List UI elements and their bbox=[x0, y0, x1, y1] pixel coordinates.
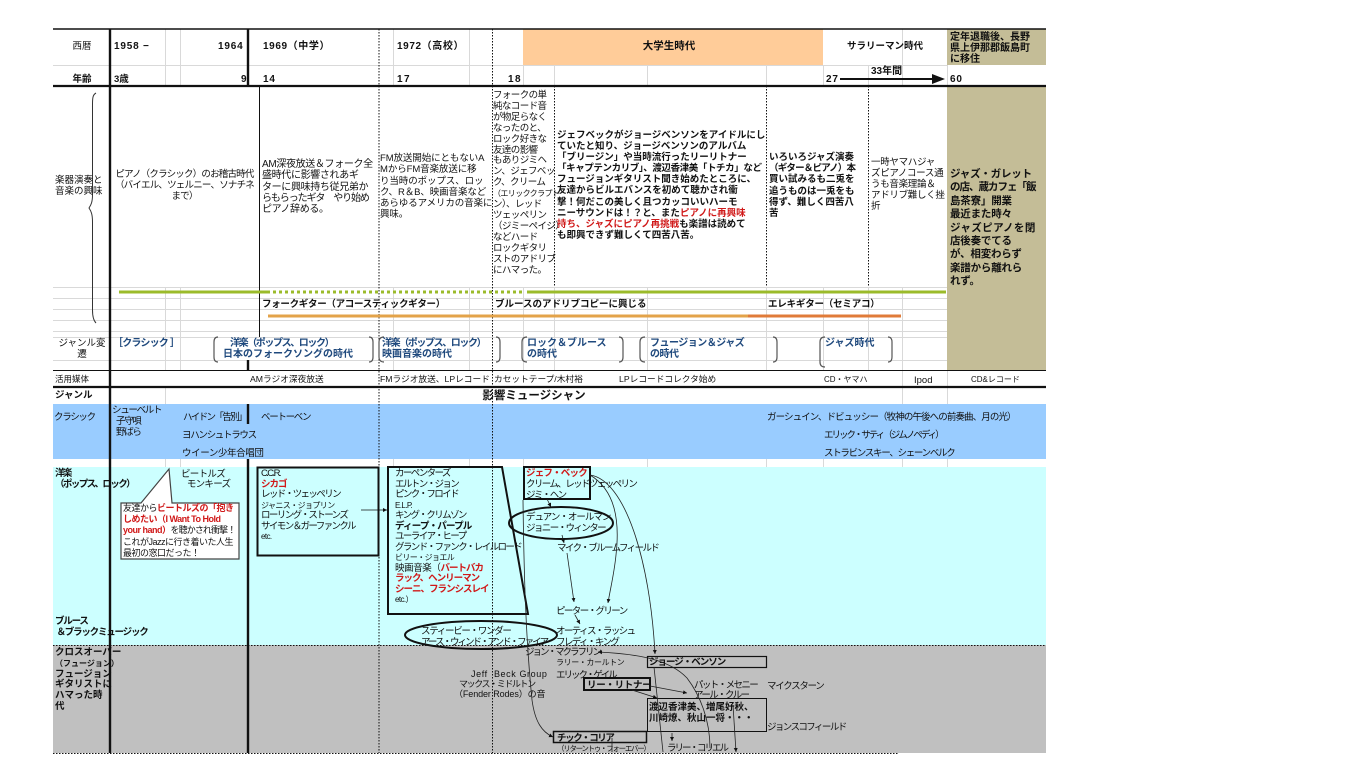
list: seventies artists: グランド・ファンク・レイルロード bbox=[395, 542, 521, 552]
list: seventies artists: ユーライア・ヒープ bbox=[395, 531, 466, 542]
list: seventies artists: ピンク・フロイド bbox=[395, 489, 458, 500]
genre: fusion and jazz era: フュージョン＆ジャズ bbox=[650, 338, 744, 349]
text: jazz cafe: 店後奏でてる bbox=[950, 235, 1012, 247]
text: FM radio period: あらゆるアメリカの音楽に bbox=[380, 198, 492, 209]
text: folk to rock period: 純なコード音 bbox=[493, 101, 546, 112]
text: fusion discovery: 撃！何だこの美しく且つカッコいいハーモ bbox=[557, 197, 738, 208]
list: first rock artists: サイモン＆ガーファンクル bbox=[261, 520, 355, 532]
text: yamaha course: アドリブ難しく挫 bbox=[871, 190, 945, 201]
header: age row: 9 bbox=[241, 74, 247, 85]
text: jazz attempts: いろいろジャズ演奏 bbox=[769, 152, 854, 163]
text: jazz cafe: れず。 bbox=[950, 275, 980, 287]
list: first rock artists: ローリング・ストーンズ bbox=[261, 510, 347, 521]
panel text: classical musicians: シューベルト bbox=[112, 405, 161, 416]
label: electric guitar: エレキギター（セミアコ） bbox=[768, 299, 880, 310]
label: crossover fusion: クロスオーバー bbox=[55, 647, 121, 658]
text: yamaha course bbox=[871, 156, 945, 212]
text: Pat Metheny and Earl Klugh: パット・メセニー bbox=[694, 680, 757, 691]
list: seventies artists: 映画音楽（バートバカ bbox=[395, 562, 483, 574]
text: Japanese guitarists: 渡辺香津美、増尾好秋、 bbox=[649, 702, 754, 713]
text: jazz cafe: が、相変わらず bbox=[950, 248, 1022, 260]
text: fusion discovery: フュージョンギタリスト聞き始めたところに、 bbox=[557, 174, 756, 185]
list: Duane Allman and Johnny Winter: ジョニー・ウィンター bbox=[526, 523, 605, 534]
label: blues copying: ブルースのアドリブコピーに興じる bbox=[495, 299, 647, 310]
text: AM radio period: ピアノ辞める。 bbox=[262, 204, 329, 215]
list: Stevie Wonder and Earth Wind and Fire: アース・ウィンド・アンド・ファイア bbox=[421, 636, 547, 648]
row: media used: 活用媒体 bbox=[55, 374, 89, 384]
label: genre changes: 遷 bbox=[77, 349, 87, 360]
row: media used: CD&レコード bbox=[971, 375, 1020, 384]
text: folk to rock period: ン、ジェフベッ bbox=[493, 166, 555, 177]
header: retirement note: 県上伊那郡飯島町 bbox=[950, 43, 1030, 54]
box: Chick Corea bbox=[554, 732, 646, 742]
list: seventies artists: ラック、ヘンリーマン bbox=[395, 573, 479, 584]
header: year row: 西暦 bbox=[72, 41, 92, 52]
text: FM radio period: 興味。 bbox=[380, 209, 408, 220]
text: AM radio period: ターに興味持ち従兄弟か bbox=[262, 182, 368, 193]
text: folk to rock period: （エリッククラプト bbox=[493, 189, 559, 198]
list: Jeff Beck influences: ジェフ・ベック bbox=[526, 468, 587, 479]
text: fusion discovery: ていたと知り、ジョージベンソンのアルバム bbox=[557, 141, 746, 152]
text: jazz attempts: 買い試みるも二兎を bbox=[769, 174, 855, 185]
genre: pops rock and folk era bbox=[223, 337, 353, 360]
text: yamaha course: 一時ヤマハジャ bbox=[871, 157, 935, 168]
ellipse: Duane and Johnny bbox=[509, 507, 613, 539]
text: Eric Gale: エリック・ゲイル bbox=[556, 670, 616, 681]
panel text: classical musicians: エリック・サティ（ジムノペディ） bbox=[824, 430, 943, 441]
list: Jeff Beck influences: クリーム、レッドツェッペリン bbox=[526, 479, 636, 490]
text: George Benson: ジョージ・ベンソン bbox=[649, 657, 725, 668]
text: yamaha course: うも音楽理論＆ bbox=[871, 179, 935, 190]
label: instruments and interests: 楽器演奏と bbox=[55, 175, 103, 186]
header: age row: 18 bbox=[508, 74, 522, 85]
header: age row: 3歳 bbox=[114, 74, 129, 85]
text: FM radio period bbox=[380, 152, 492, 220]
label: instruments and interests: 音楽の興味 bbox=[55, 186, 103, 197]
text: AM radio period: AM深夜放送＆フォーク全 bbox=[262, 159, 373, 170]
list: seventies artists: ディープ・パープル bbox=[395, 520, 472, 532]
row: media used: カセットテープ/木村裕 bbox=[494, 374, 583, 384]
text: fusion discovery bbox=[557, 129, 765, 241]
list: first rock artists: etc. bbox=[261, 532, 272, 541]
box: Japanese guitarists bbox=[648, 698, 766, 732]
header: age row: 27 bbox=[826, 74, 839, 85]
label: blues and black music bbox=[55, 615, 148, 638]
header: age row: 14 bbox=[263, 74, 276, 85]
header: age row: 17 bbox=[397, 74, 411, 85]
arrow: 27 to 60, 33 years bbox=[840, 74, 945, 84]
panel text: classical musicians: ベートーベン bbox=[261, 412, 310, 423]
text: jazz attempts: 追うものは一兎をも bbox=[769, 186, 855, 197]
header: retirement note: 定年退職後、長野 bbox=[950, 32, 1030, 43]
panel text: classical musicians: ストラビンスキー、シェーンベルク bbox=[824, 448, 954, 459]
text: piano period: ピアノ（クラシック）のお稽古時代 bbox=[115, 169, 254, 180]
text: folk to rock period: 友達の影響 bbox=[493, 145, 538, 156]
text: AM radio period: らもらったギタ やり始め bbox=[262, 193, 369, 204]
text: Return to Forever: （リターントゥ・フォーエバー） bbox=[557, 744, 650, 753]
text: jazz cafe: の店、蔵カフェ「飯 bbox=[950, 181, 1036, 193]
panel text: classical musicians: クラシック bbox=[54, 412, 95, 423]
genre: pops rock and folk era: 日本のフォークソングの時代 bbox=[223, 349, 353, 360]
genre: fusion and jazz era: の時代 bbox=[650, 349, 678, 360]
callout text bbox=[123, 503, 235, 558]
label: folk guitar: フォークギター（アコースティックギター） bbox=[262, 299, 445, 310]
label: genre changes bbox=[58, 338, 106, 360]
text: jazz cafe: 楽譜から離れら bbox=[950, 262, 1022, 274]
text: Pat Metheny and Earl Klugh bbox=[694, 680, 758, 700]
text: folk to rock period bbox=[493, 90, 564, 276]
label: crossover fusion: ハマった時 bbox=[55, 690, 103, 701]
list: Stevie Wonder and Earth Wind and Fire bbox=[421, 626, 548, 648]
panel text: classical musicians: ヨハンシュトラウス bbox=[182, 430, 256, 441]
text: Jeff Beck Group note: （Fender Rodes）の音 bbox=[454, 689, 545, 699]
text: jazz cafe: ジャズピアノを閉 bbox=[950, 222, 1036, 234]
box: first rock artists bbox=[258, 468, 378, 556]
label: crossover fusion: ギタリストに bbox=[55, 679, 112, 690]
list: Jeff Beck influences: ジミ・ヘン bbox=[526, 490, 566, 501]
icon: curly brace bbox=[89, 93, 96, 323]
text: folk to rock period: などハード bbox=[493, 232, 538, 243]
header: year row: サラリーマン時代 bbox=[847, 41, 923, 52]
ellipse: Stevie and EWF bbox=[405, 621, 557, 649]
text: fusion discovery: も即興できず難しくて四苦八苦。 bbox=[557, 230, 699, 241]
text: piano period: まで） bbox=[171, 191, 198, 202]
panel: classical band bbox=[53, 404, 1046, 459]
header: age row: 年齢 bbox=[72, 74, 92, 85]
text: FM radio period: MからFM音楽放送に移 bbox=[380, 164, 477, 175]
text: jazz cafe: ジャズ・ガレット bbox=[950, 168, 1032, 180]
genre: jazz era: ジャズ時代 bbox=[825, 338, 874, 349]
label: crossover fusion: （フュージョン） bbox=[55, 659, 119, 668]
text: Larry Coryell: ラリー・コリエル bbox=[667, 743, 727, 754]
text: folk to rock period: ロックギタリ bbox=[493, 243, 546, 254]
panel text: classical musicians: ガーシュイン、ドビュッシー（牧神の午後への前奏曲、月の光） bbox=[767, 412, 1016, 423]
text: Mike Bloomfield: マイク・ブルームフィールド bbox=[557, 543, 658, 554]
genre: pops rock and film music era: 映画音楽の時代 bbox=[382, 349, 452, 360]
genre era brackets bbox=[214, 337, 892, 367]
text: beatles and monkees bbox=[181, 468, 230, 490]
label: pops and rock: （ポップス、ロック） bbox=[55, 478, 134, 490]
text: FM radio period: FM放送開始にともないA bbox=[380, 153, 484, 164]
row: media used: AMラジオ深夜放送 bbox=[250, 374, 324, 384]
label: blues and black music: ＆ブラックミュージック bbox=[56, 627, 148, 638]
genre: pops rock and film music era: 洋楽（ポップス、ロック） bbox=[382, 338, 485, 349]
text: Jeff Beck Group note: マックス・ミドルトン bbox=[459, 679, 535, 689]
text: fusion discovery: 友達からビルエバンスを初めて聴かされ衝 bbox=[557, 185, 738, 196]
text: Lee Ritenour: リー・リトナー bbox=[587, 680, 651, 691]
text: AM radio period: 盛時代に影響されあギ bbox=[262, 170, 358, 181]
timeline: piano line bbox=[119, 290, 946, 294]
text: fusion discovery: ジェフベックがジョージベンソンをアイドルにし bbox=[557, 130, 765, 141]
text: Japanese guitarists: 川崎燎、秋山一将・・・ bbox=[649, 712, 754, 724]
text: John McLaughlin: ジョン・マクラフリン bbox=[525, 647, 600, 658]
text: Mike Stern: マイクスターン bbox=[767, 681, 823, 692]
genre: fusion and jazz era bbox=[650, 336, 744, 360]
list: first rock artists: C.C.R. bbox=[261, 468, 280, 479]
genre: rock and blues era bbox=[527, 336, 606, 360]
genre: rock and blues era: ロック＆ブルース bbox=[527, 338, 606, 349]
panel: retirement column bbox=[947, 87, 1046, 370]
label: 33 years: 33年間 bbox=[871, 66, 902, 77]
text: jazz cafe bbox=[950, 168, 1036, 287]
genre: pops rock and folk era: 洋楽（ポップス、ロック） bbox=[230, 338, 333, 349]
header: year row: 1969（中学） bbox=[263, 41, 330, 52]
text: folk to rock period: ストのアドリブ bbox=[493, 254, 555, 265]
arrow: rock to seventies bbox=[361, 509, 387, 511]
text: Jeff Beck Group note: Jeff Beck Group bbox=[471, 669, 547, 679]
text: folk to rock period: フォークの単 bbox=[493, 90, 546, 101]
header: year row: 1958 − bbox=[114, 41, 150, 52]
text: jazz attempts: 苦 bbox=[769, 208, 779, 219]
text: fusion discovery: ニーサウンドは！？と、またピアノに再興味 bbox=[557, 208, 746, 219]
header: year row: 1972（高校） bbox=[397, 41, 464, 52]
panel text: classical musicians: 子守唄 bbox=[116, 416, 141, 427]
panel text: classical musicians: ハイドン「告別」 bbox=[183, 412, 246, 423]
list: Stevie Wonder and Earth Wind and Fire: スティービー・ワンダー bbox=[421, 626, 511, 637]
text: folk to rock period: ロック好きな bbox=[493, 134, 546, 145]
text: piano period bbox=[115, 168, 254, 202]
arrows: influence connections bbox=[523, 475, 736, 752]
label: genre changes: ジャンル変 bbox=[58, 338, 106, 349]
text: jazz cafe: 島茶寮」開業 bbox=[950, 195, 1012, 207]
list: seventies artists: キング・クリムゾン bbox=[395, 510, 466, 521]
row: media used: LPレコードコレクタ始め bbox=[619, 374, 716, 384]
label: crossover fusion: 代 bbox=[55, 701, 65, 712]
box: seventies artists bbox=[388, 467, 528, 614]
panel text: classical musicians: 野ばら bbox=[116, 427, 141, 438]
label: genre column: ジャンル bbox=[55, 390, 93, 401]
text: yamaha course: 折 bbox=[871, 201, 880, 212]
row: media used: Ipod bbox=[914, 375, 932, 386]
row: media used: CD・ヤマハ bbox=[824, 375, 868, 384]
text: folk to rock period: なったのと、 bbox=[493, 123, 546, 134]
box: George Benson bbox=[648, 656, 766, 668]
text: folk to rock period: にハマった。 bbox=[493, 264, 546, 276]
panel: university era header bbox=[523, 29, 823, 65]
row: media used: FMラジオ放送、LPレコード bbox=[380, 374, 490, 384]
label: blues and black music: ブルース bbox=[55, 616, 88, 627]
header: year row: 1964 bbox=[218, 41, 243, 52]
panel text: classical musicians bbox=[54, 405, 1016, 459]
panel: crossover band bbox=[53, 645, 1046, 753]
label: crossover fusion bbox=[55, 646, 121, 712]
text: FM radio period: り当時のポップス、ロッ bbox=[380, 176, 483, 187]
text: folk to rock period: ン）、レッド bbox=[493, 199, 542, 210]
list: seventies artists: カーペンターズ bbox=[395, 468, 450, 479]
genre: pops rock and film music era bbox=[382, 337, 485, 360]
timeline: guitar line bbox=[268, 314, 901, 318]
header: year row bbox=[72, 40, 923, 52]
heading: influential musicians: 影響ミュージシャン bbox=[482, 390, 586, 402]
list: seventies artists: ビリー・ジョエル bbox=[395, 553, 454, 562]
text: Peter Green: ピーター・グリーン bbox=[556, 606, 627, 617]
list: seventies artists: エルトン・ジョン bbox=[395, 478, 458, 490]
text: fusion discovery: 「キャプテンカリブ」、渡辺香津美「トチカ」など bbox=[557, 163, 762, 174]
text: John Scofield: ジョンスコフィールド bbox=[767, 722, 846, 733]
list: Otis Rush and Freddie King bbox=[556, 626, 635, 648]
list: seventies artists: E.L.P. bbox=[395, 500, 412, 510]
label: pops and rock: 洋楽 bbox=[55, 468, 71, 479]
panel text: classical musicians: ウイーン少年合唱団 bbox=[182, 448, 263, 459]
header: retirement note: に移住 bbox=[950, 54, 980, 65]
box: Jeff Beck bbox=[524, 467, 590, 499]
text: Chick Corea: チック・コリア bbox=[557, 733, 614, 744]
text: folk to rock period: もありジミヘ bbox=[493, 155, 546, 166]
text: jazz attempts: 得ず、難しく四苦八 bbox=[769, 197, 854, 208]
text: FM radio period: ク、R＆B、映画音楽など bbox=[380, 187, 486, 198]
text: jazz attempts bbox=[769, 151, 856, 219]
callout text: しめたい（I Want To Hold bbox=[123, 514, 220, 524]
panel: pops and rock band bbox=[53, 467, 1046, 645]
list: Duane Allman and Johnny Winter bbox=[526, 512, 611, 534]
text: beatles and monkees: モンキーズ bbox=[187, 479, 230, 490]
callout text: 最初の窓口だった！ bbox=[123, 548, 200, 558]
text: fusion discovery: 「ブリージン」や当時流行ったリーリトナー bbox=[557, 152, 747, 163]
list: Duane Allman and Johnny Winter: デュアン・オールマン bbox=[526, 512, 610, 523]
text: jazz cafe: 最近また時々 bbox=[950, 208, 1012, 220]
text: folk to rock period: ク、クリーム bbox=[493, 177, 545, 188]
text: folk to rock period: ツェッペリン bbox=[493, 210, 546, 221]
list: first rock artists: シカゴ bbox=[261, 478, 287, 490]
text: folk to rock period: が物足らなく bbox=[493, 112, 546, 123]
text: folk to rock period: （ジミーペイジ） bbox=[493, 221, 564, 232]
header: age row: 60 bbox=[950, 74, 963, 85]
header: retirement note bbox=[950, 31, 1030, 65]
row: media used bbox=[55, 374, 1020, 386]
list: Otis Rush and Freddie King: フレディ・キング bbox=[556, 636, 618, 648]
label: instruments and interests bbox=[55, 174, 103, 197]
genre: classical era: ［クラシック ］ bbox=[113, 338, 179, 349]
list: seventies artists bbox=[395, 468, 522, 604]
text: fusion discovery: 持ち、ジャズにピアノ再挑戦も楽譜は読めて bbox=[557, 219, 746, 230]
list: seventies artists: シーニ、フランシスレイ bbox=[395, 584, 489, 594]
list: Jeff Beck influences bbox=[526, 468, 638, 501]
callout text: これがJazzに行き着いた人生 bbox=[123, 537, 233, 547]
list: Otis Rush and Freddie King: オーティス・ラッシュ bbox=[556, 626, 634, 637]
text: jazz attempts: （ギター＆ピアノ）本 bbox=[769, 163, 855, 174]
text: piano period: （バイエル、ツェルニー、ソナチネ bbox=[115, 180, 254, 191]
header: year row: 大学生時代 bbox=[643, 40, 695, 52]
label: pops and rock bbox=[55, 468, 134, 490]
label: crossover fusion: フュージョン bbox=[55, 669, 112, 680]
text: Pat Metheny and Earl Klugh: アール・クルー bbox=[694, 690, 748, 700]
box: Lee Ritenour bbox=[584, 678, 650, 690]
genre: rock and blues era: の時代 bbox=[527, 349, 557, 360]
list: first rock artists: ジャニス・ジョプリン bbox=[261, 500, 335, 510]
text: Jeff Beck Group note bbox=[454, 669, 547, 699]
callout text: your hand）を聴かされ衝撃！ bbox=[123, 525, 235, 535]
text: Japanese guitarists bbox=[649, 702, 754, 724]
callout text: 友達からビートルズの「抱き bbox=[123, 503, 234, 513]
text: yamaha course: ズピアノコース通 bbox=[871, 168, 943, 179]
text: Larry Carlton: ラリー・カールトン bbox=[556, 658, 624, 667]
text: AM radio period bbox=[262, 158, 373, 215]
panel: retirement header bbox=[947, 29, 1046, 65]
text: beatles and monkees: ビートルズ bbox=[181, 469, 225, 480]
list: first rock artists bbox=[261, 468, 356, 541]
list: first rock artists: レッド・ツェッペリン bbox=[261, 489, 340, 500]
list: seventies artists: etc.） bbox=[395, 595, 413, 604]
header: age row bbox=[72, 74, 963, 85]
